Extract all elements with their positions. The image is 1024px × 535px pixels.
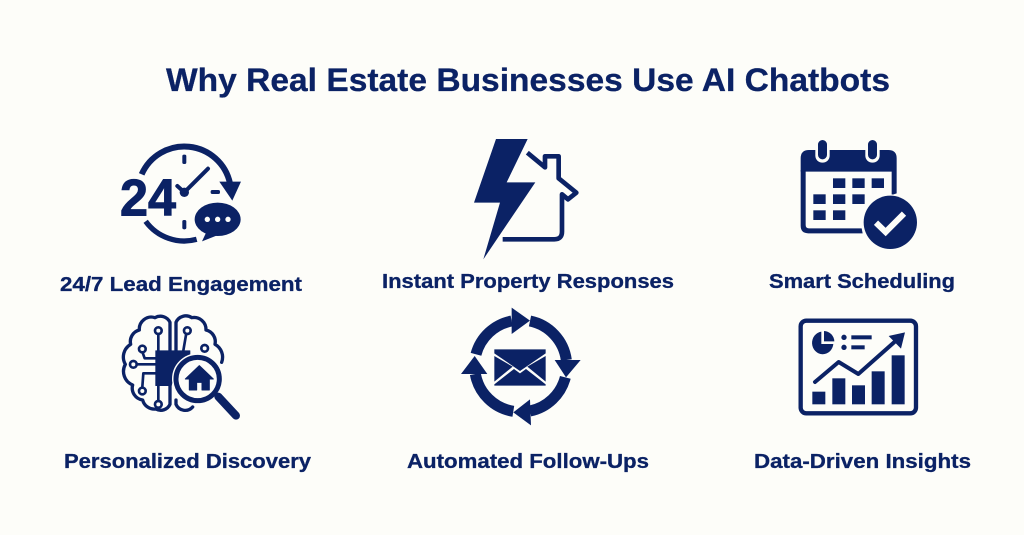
icon: brain circuit with magnifying glass xyxy=(123,316,236,416)
label: Data-Driven Insights: Data-Driven Insights xyxy=(754,450,971,473)
label: Smart Scheduling: Smart Scheduling xyxy=(769,270,955,293)
icon: 24/7 clock with chat bubble xyxy=(120,146,241,241)
icon: lightning bolt and house xyxy=(474,139,576,259)
label: Automated Follow-Ups: Automated Follow-Ups xyxy=(407,450,649,473)
label: Personalized Discovery: Personalized Discovery xyxy=(64,450,312,473)
label: Instant Property Responses: Instant Property Responses xyxy=(382,270,674,293)
label: 24/7 Lead Engagement: 24/7 Lead Engagement xyxy=(60,273,302,296)
icon: analytics dashboard xyxy=(801,321,916,413)
icon: envelope with circular arrows xyxy=(461,308,581,425)
icon: calendar with check xyxy=(801,139,918,250)
title: Why Real Estate Businesses Use AI Chatbots xyxy=(166,62,890,98)
numerals: 24: 24 xyxy=(120,170,176,228)
